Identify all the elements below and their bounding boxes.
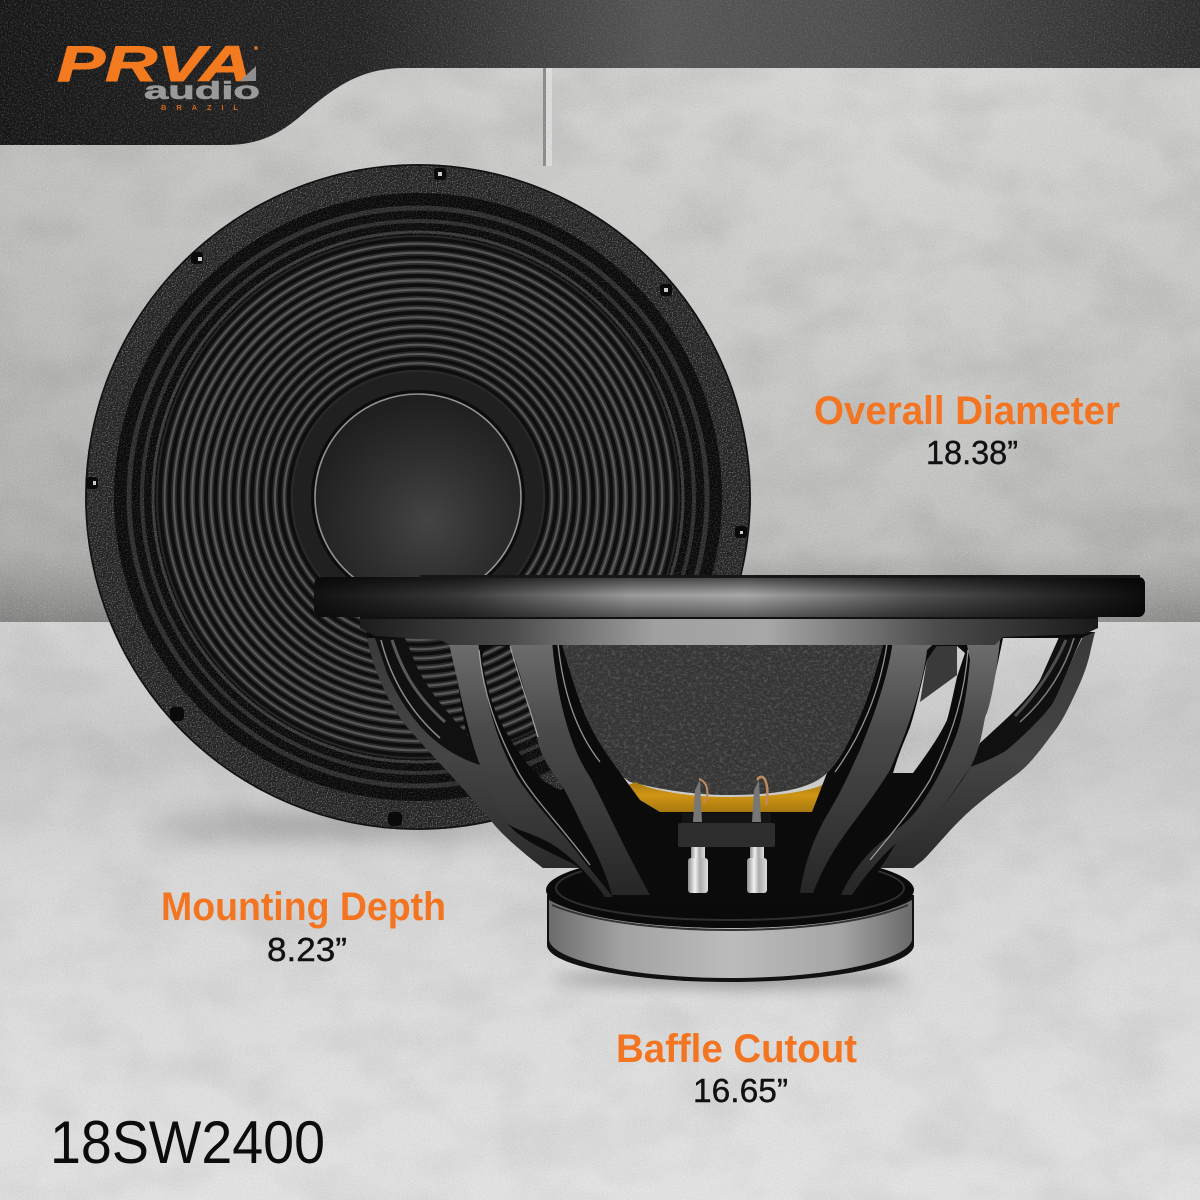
speaker frame flange xyxy=(80,160,760,840)
label: mounting depth xyxy=(161,885,446,968)
background: concrete wall xyxy=(0,0,1200,625)
brand logo: audio xyxy=(144,77,260,105)
magnet base shadow xyxy=(550,973,910,985)
label: baffle cutout xyxy=(616,1027,857,1109)
label: baffle cutout: 16.65” xyxy=(693,1072,788,1109)
terminal block xyxy=(678,777,775,847)
brand logo: PRVA xyxy=(57,36,252,92)
model name: 18SW2400 xyxy=(50,1109,325,1176)
inner glossy ring right xyxy=(970,635,1083,767)
magnet base xyxy=(546,852,914,982)
mounting rim xyxy=(314,575,1145,619)
left middle arm xyxy=(448,640,613,897)
right outer arm xyxy=(880,632,1095,868)
brand logo: BRAZIL xyxy=(161,103,238,112)
right inner arm xyxy=(800,640,938,893)
cone seen through the frame xyxy=(562,645,883,795)
side spider stubs xyxy=(562,778,898,795)
ribbed cone xyxy=(156,235,680,759)
chrome terminals xyxy=(688,847,767,893)
surround xyxy=(110,190,730,810)
top dark textured band xyxy=(0,0,1200,146)
label: baffle cutout: Baffle Cutout xyxy=(616,1027,857,1071)
mounting bolts xyxy=(86,168,747,826)
brand logo xyxy=(57,36,260,112)
right middle arm xyxy=(841,640,1000,895)
rear speaker shadow xyxy=(150,819,530,833)
background: concrete floor xyxy=(0,622,1200,1200)
inner glossy ring left xyxy=(375,638,480,765)
arm edge highlights xyxy=(479,644,968,865)
label: overall diameter: 18.38” xyxy=(926,434,1018,471)
left outer arm xyxy=(367,638,580,868)
dust cap xyxy=(293,372,543,622)
label: overall diameter: Overall Diameter xyxy=(814,389,1120,433)
basket frame with windows xyxy=(367,632,1095,905)
label: mounting depth: 8.23” xyxy=(267,931,347,968)
voice coil spider xyxy=(628,778,830,812)
label: overall diameter xyxy=(814,389,1120,471)
cone fragment through right slot xyxy=(920,646,957,702)
left inner arm xyxy=(508,640,650,895)
label: mounting depth: Mounting Depth xyxy=(161,885,446,929)
side-view speaker xyxy=(314,575,1145,985)
basket mounting band xyxy=(360,619,1098,645)
front-facing speaker xyxy=(80,160,760,840)
